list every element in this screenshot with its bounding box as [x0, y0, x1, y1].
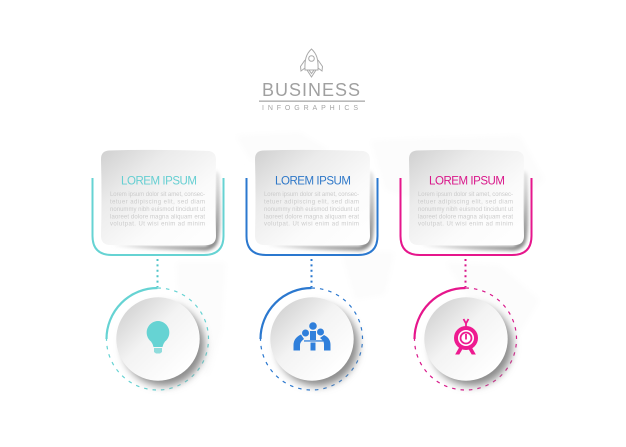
body text: volutpat. Ut wisi enim ad minim — [418, 222, 513, 228]
body text — [418, 192, 513, 228]
body text: Lorem ipsum dolor sit amet, consec- — [418, 192, 513, 198]
dotted connector — [464, 259, 466, 287]
subtitle: INFOGRAPHICS: INFOGRAPHICS — [262, 105, 358, 112]
body text: laoreet dolore magna aliquam erat — [418, 214, 513, 220]
body text: laoreet dolore magna aliquam erat — [110, 214, 205, 220]
circle shadow — [430, 304, 512, 386]
step 1 circle with lightbulb — [106, 259, 208, 390]
dashed ring — [260, 288, 362, 390]
body text: nonummy nibh euismod tincidunt ut — [418, 207, 513, 213]
body text: volutpat. Ut wisi enim ad minim — [264, 222, 359, 228]
card — [409, 150, 524, 246]
card — [255, 150, 370, 246]
dashed ring — [106, 288, 208, 390]
body text — [264, 192, 359, 228]
dashed ring — [414, 288, 516, 390]
title: BUSINESS: BUSINESS — [262, 80, 360, 100]
heading: LOREM IPSUM — [275, 176, 351, 188]
bracket outline — [400, 178, 532, 255]
circle — [424, 297, 508, 381]
body text: nonummy nibh euismod tincidunt ut — [264, 207, 359, 213]
body text: tetuer adipiscing elit, sed diam — [110, 200, 205, 206]
icon: target with arrow — [456, 319, 476, 354]
solid arc — [414, 288, 466, 339]
icon: team around table — [294, 322, 330, 350]
step 3 circle with target icon — [414, 259, 516, 390]
card shadow — [266, 170, 374, 251]
panel: step 1 card — [92, 150, 224, 255]
dotted connector — [310, 259, 312, 287]
background world map — [176, 132, 545, 378]
card shadow — [112, 170, 220, 251]
solid arc — [260, 288, 312, 339]
body text — [110, 192, 205, 228]
panel: step 2 card — [246, 150, 378, 255]
body text: Lorem ipsum dolor sit amet, consec- — [264, 192, 359, 198]
bracket outline — [92, 178, 224, 255]
header: business infographics logo — [259, 49, 365, 112]
body text: tetuer adipiscing elit, sed diam — [418, 200, 513, 206]
step 2 circle with team icon — [260, 259, 362, 390]
circle — [116, 297, 200, 381]
title underline — [259, 100, 365, 102]
circle — [270, 297, 354, 381]
panel: step 3 card — [400, 150, 532, 255]
body text: volutpat. Ut wisi enim ad minim — [110, 222, 205, 228]
card — [101, 150, 216, 246]
circle shadow — [122, 304, 204, 386]
body text: tetuer adipiscing elit, sed diam — [264, 200, 359, 206]
heading: LOREM IPSUM — [121, 176, 197, 188]
icon: rocket — [300, 49, 322, 77]
icon: lightbulb — [147, 321, 169, 354]
body text: nonummy nibh euismod tincidunt ut — [110, 207, 205, 213]
bracket outline — [246, 178, 378, 255]
body text: Lorem ipsum dolor sit amet, consec- — [110, 192, 205, 198]
heading: LOREM IPSUM — [429, 176, 505, 188]
card shadow — [420, 170, 528, 251]
circle shadow — [276, 304, 358, 386]
solid arc — [106, 288, 158, 339]
body text: laoreet dolore magna aliquam erat — [264, 214, 359, 220]
dotted connector — [156, 259, 158, 287]
